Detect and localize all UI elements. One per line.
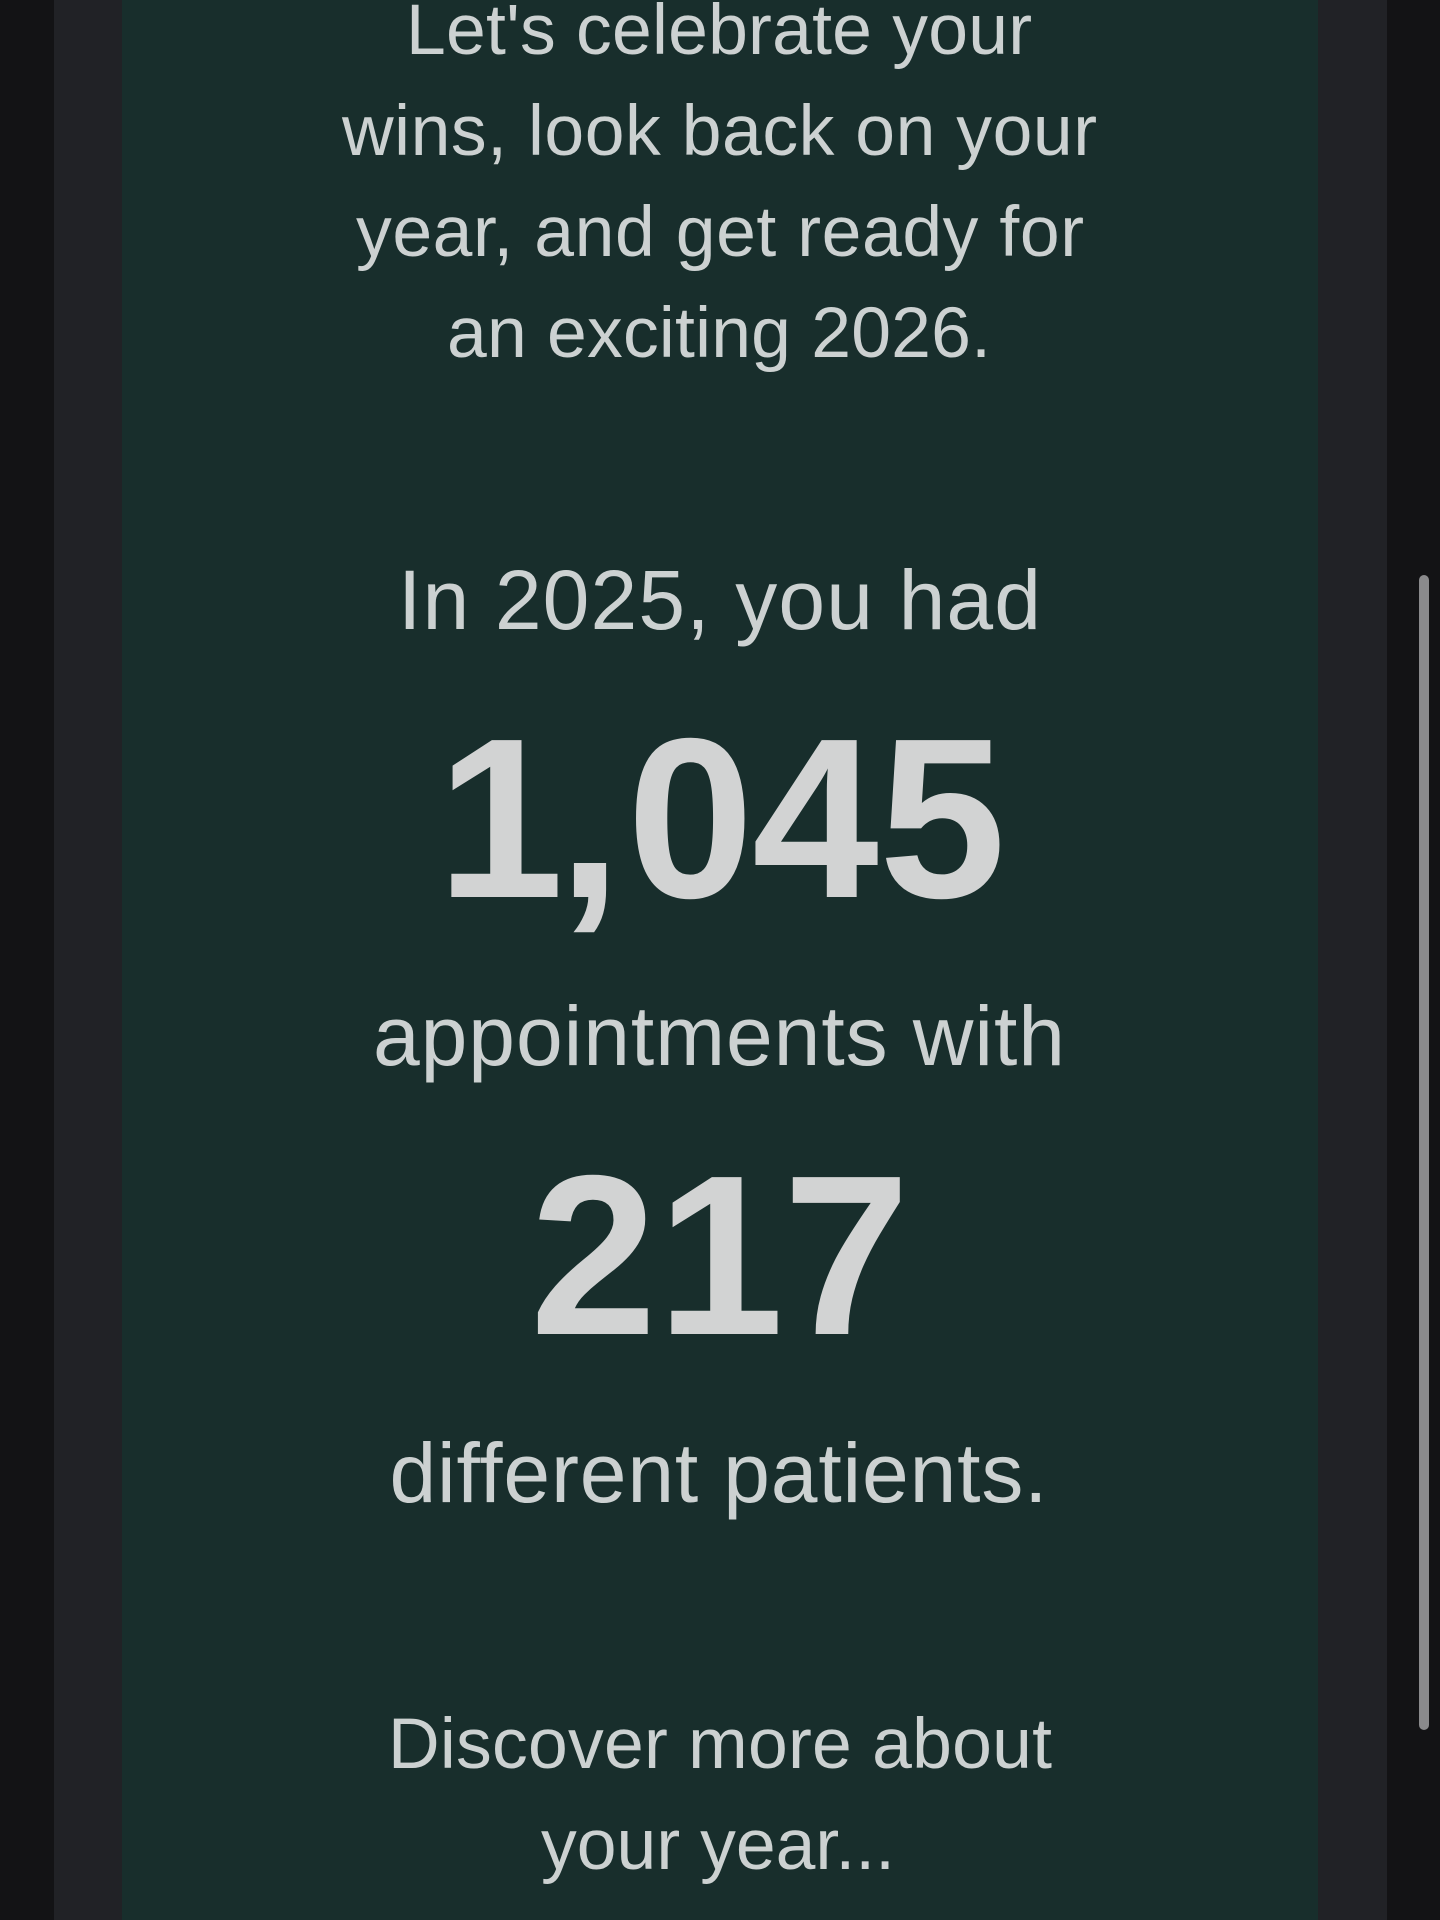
stat: appointments count: 1,045	[437, 692, 1006, 946]
text: appointments with: appointments with	[373, 989, 1065, 1083]
text: different patients: different patients.	[390, 1426, 1048, 1520]
text: in 2025 you had: In 2025, you had	[398, 553, 1041, 647]
text block: call to action: your year...	[541, 1805, 895, 1885]
text block: intro message: an exciting 2026.	[447, 293, 991, 373]
stat: patients count: 217	[530, 1129, 910, 1383]
text block: intro message: wins, look back on your	[341, 91, 1097, 171]
text block: call to action	[388, 1704, 1052, 1885]
scrollbar	[1419, 575, 1429, 1730]
text block: intro message	[341, 0, 1097, 373]
text block: call to action: Discover more about	[388, 1704, 1052, 1784]
text block: intro message: year, and get ready for	[356, 192, 1084, 272]
